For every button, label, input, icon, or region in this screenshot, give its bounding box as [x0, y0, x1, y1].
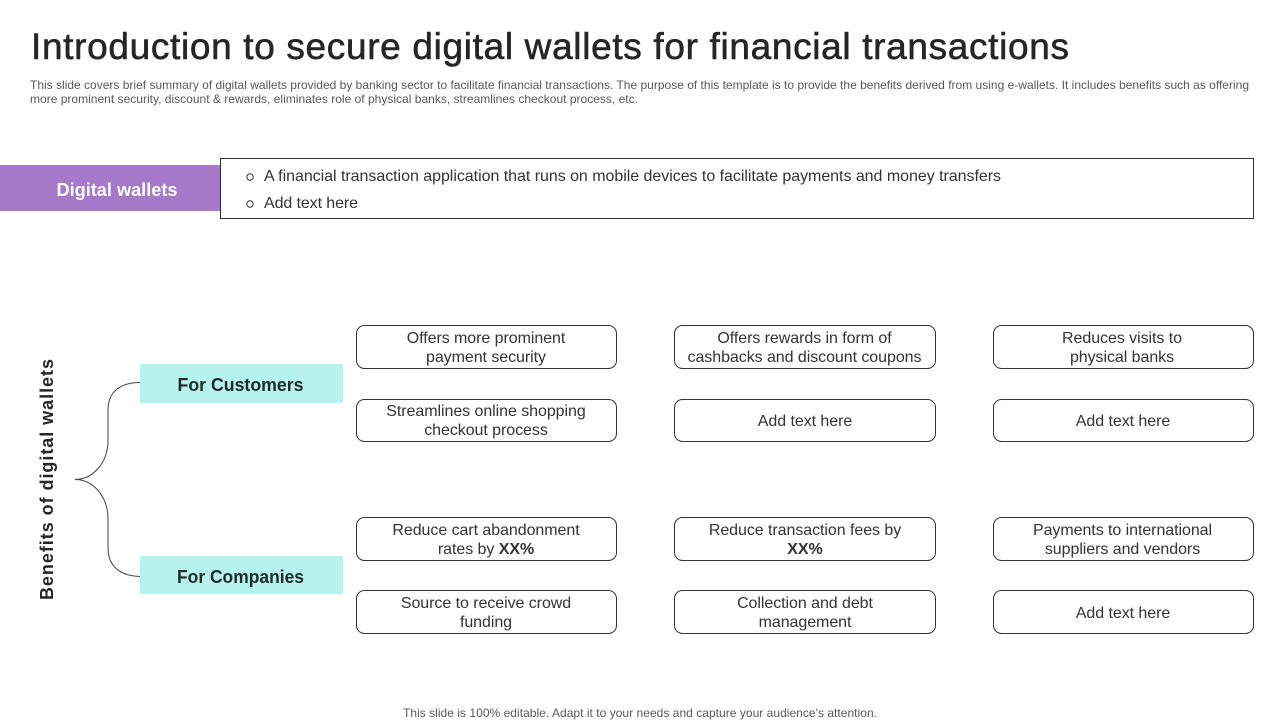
box: company placeholder: Add text here [1076, 605, 1170, 622]
category: for customers: For Customers [178, 375, 304, 395]
box: customer placeholder 2: Add text here [1076, 413, 1170, 430]
box: international payments: suppliers and vendors [1045, 541, 1200, 558]
box: international payments: Payments to international [1033, 522, 1212, 539]
box: company placeholder [994, 590, 1254, 634]
category: for companies: For Companies [177, 567, 304, 587]
box: reduced bank visits: Reduces visits to [1062, 330, 1182, 347]
intro text block: more prominent security, discount & rewards, eliminates role of physical banks, streamlines checkout process, etc. [30, 92, 638, 106]
box: debt management [674, 590, 936, 634]
intro text block: This slide covers brief summary of digital wallets provided by banking sector to facilitate financial transactions. The purpose of this template is to provide the benefits derived from using e-wallets. It includes benefits such as offering [30, 78, 1249, 92]
panel: digital wallets label [0, 165, 220, 211]
box: customer placeholder 1 [674, 400, 936, 442]
panel: digital wallets description: A financial transaction application that runs on mobile devices to facilitate payments and money transfers [264, 168, 1001, 185]
box: crowd funding: funding [460, 614, 512, 631]
box: payment security: payment security [426, 349, 546, 366]
box: checkout: Streamlines online shopping [386, 403, 586, 420]
vertical heading: benefits of digital wallets: Benefits of digital wallets [37, 359, 57, 600]
category: for companies [140, 556, 343, 594]
intro text block [30, 78, 1249, 106]
box: transaction fees: XX% [787, 541, 823, 558]
box: checkout [356, 400, 616, 442]
box: international payments [994, 518, 1254, 560]
box: transaction fees [674, 518, 936, 560]
title: Introduction to secure digital wallets for financial transactions [31, 26, 1069, 67]
panel: digital wallets label: Digital wallets [56, 180, 178, 200]
box: reduced bank visits [994, 326, 1254, 368]
box: cart abandonment: Reduce cart abandonment [392, 522, 580, 539]
box: rewards: cashbacks and discount coupons [688, 349, 922, 366]
box: rewards [674, 326, 936, 368]
panel: digital wallets description: Add text here [264, 195, 358, 212]
box: payment security: Offers more prominent [407, 330, 566, 347]
box: debt management: management [759, 614, 852, 631]
panel: digital wallets description [220, 158, 1254, 218]
category: for customers [140, 364, 343, 403]
box: crowd funding: Source to receive crowd [401, 595, 571, 612]
box: cart abandonment [356, 518, 616, 560]
box: crowd funding [356, 590, 616, 634]
box: customer placeholder 2 [994, 400, 1254, 442]
box: customer placeholder 1: Add text here [758, 413, 852, 430]
box: cart abandonment: rates by XX% [438, 541, 534, 558]
box: payment security [356, 326, 616, 368]
box: debt management: Collection and debt [737, 595, 874, 612]
footer note: This slide is 100% editable. Adapt it to your needs and capture your audience's attention. [403, 706, 877, 720]
bracket connector [75, 382, 140, 576]
box: transaction fees: Reduce transaction fees by [709, 522, 901, 539]
box: reduced bank visits: physical banks [1070, 349, 1174, 366]
box: rewards: Offers rewards in form of [717, 330, 892, 347]
box: checkout: checkout process [424, 422, 548, 439]
